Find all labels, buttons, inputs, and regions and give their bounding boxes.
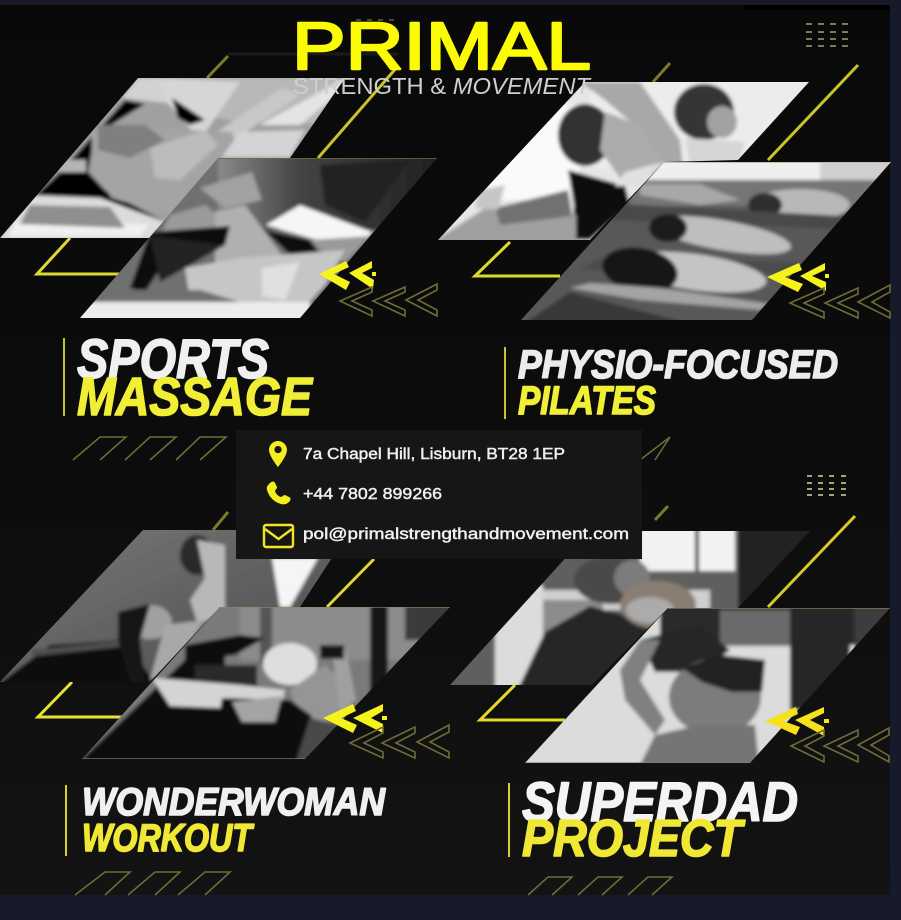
icon: dot grid top right <box>806 23 848 47</box>
icon: phone <box>267 482 290 504</box>
photo: massage upper <box>0 78 342 238</box>
photo: wonderwoman lower <box>82 607 450 759</box>
photo: pilates lower <box>521 162 891 320</box>
subtitle: STRENGTH & MOVEMENT <box>293 73 592 99</box>
heading: wonderwoman workout: WONDERWOMAN <box>82 781 386 824</box>
photo: superdad upper <box>450 531 810 685</box>
heading: physio-focused pilates: PHYSIO-FOCUSED <box>518 343 838 387</box>
decorative slashes: sports massage <box>73 437 226 460</box>
accent lines: superdad <box>480 506 855 720</box>
decorative slashes: superdad <box>528 877 672 895</box>
icon: yellow chevrons pilates <box>767 263 829 292</box>
photo: pilates upper <box>438 82 809 240</box>
photo: superdad lower <box>525 608 890 763</box>
heading: sports massage: MASSAGE <box>77 367 314 427</box>
title: primal logo <box>292 9 592 99</box>
panel: physio-focused pilates <box>438 62 891 320</box>
panel: sports massage <box>0 52 437 318</box>
icon: outline chevrons wonderwoman <box>350 725 449 758</box>
accent lines: wonderwoman <box>38 512 374 717</box>
heading: physio-focused pilates: PILATES <box>518 379 656 423</box>
accent lines: sports massage <box>37 54 398 274</box>
icon: envelope <box>264 525 293 547</box>
icon: dot grid logo area <box>356 19 394 21</box>
heading: superdad project: SUPERDAD <box>522 770 798 833</box>
icon: outline chevrons sports massage <box>340 284 437 316</box>
panel: wonderwoman workout <box>0 512 460 775</box>
icon: yellow chevrons wonderwoman <box>323 704 387 733</box>
phone number: +44 7802 899266 <box>303 486 442 503</box>
decorative slashes: wonderwoman <box>75 872 230 895</box>
contact panel <box>236 430 642 559</box>
heading: physio-focused pilates <box>504 343 838 423</box>
heading: sports massage <box>63 327 314 427</box>
heading: sports massage: SPORTS <box>77 327 269 390</box>
photo: wonderwoman upper <box>0 530 331 682</box>
icon: location pin <box>269 441 287 467</box>
decorative slashes: pilates <box>640 437 670 460</box>
icon: yellow chevrons sports massage <box>319 261 376 290</box>
photo: massage lower <box>80 158 437 318</box>
icon: outline chevrons superdad <box>791 728 889 762</box>
heading: wonderwoman workout <box>65 781 386 860</box>
panel: superdad project <box>450 505 890 763</box>
heading: superdad project: PROJECT <box>522 810 746 868</box>
accent lines: pilates <box>475 63 858 276</box>
heading: superdad project <box>508 770 798 868</box>
heading: wonderwoman workout: WORKOUT <box>82 817 255 860</box>
title: primal logo: PRIMAL <box>292 9 591 84</box>
email: pol@primalstrengthandmovement.com <box>303 526 629 543</box>
icon: outline chevrons pilates <box>790 285 890 318</box>
icon: yellow chevrons superdad <box>765 707 829 736</box>
icon: cross grid lower right <box>807 475 846 496</box>
address: 7a Chapel Hill, Lisburn, BT28 1EP <box>303 446 565 463</box>
